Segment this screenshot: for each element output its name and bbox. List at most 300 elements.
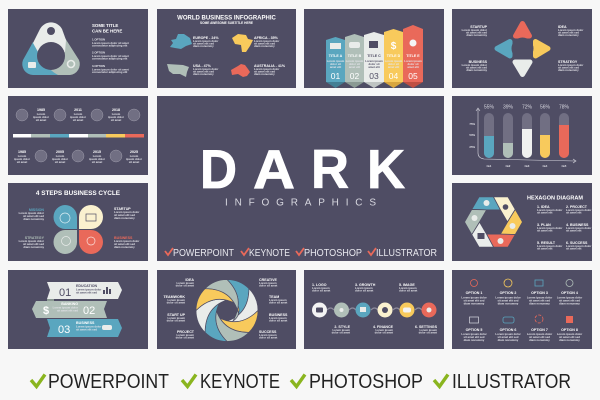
option 6: sit amet elit sed (498, 335, 519, 339)
option 7: OPTION 7 (531, 328, 548, 332)
label: usa: USA - 47% (193, 64, 212, 68)
ribbon 02: BANKING (61, 302, 78, 306)
column 5: amet elit (407, 65, 419, 69)
year 2025: 2025 (130, 150, 138, 154)
petal icons (60, 213, 96, 246)
label: australia: sit amet elit sed (254, 70, 275, 74)
label: strategy: diam nonummy (23, 245, 44, 249)
bar 2: №2 (506, 164, 511, 168)
option 2: Lorem ipsum dolor (495, 296, 522, 300)
label: europe: Lorem ipsum dolor (193, 39, 219, 43)
year 2011: Lorem (74, 112, 83, 116)
text block: Lorem ipsum dolor sit amet (92, 68, 129, 72)
option 4: OPTION 4 (561, 291, 578, 295)
labels right: SUCCESS (259, 330, 277, 334)
item 4: sit amet elit (566, 228, 581, 232)
check list (165, 247, 437, 259)
timeline bar (13, 134, 144, 138)
labels left: PROJECT (177, 330, 195, 334)
item 2: sit amet elit (566, 210, 581, 214)
text block (92, 50, 129, 60)
column 2 (345, 34, 364, 88)
option 6: diam nonummy (498, 338, 519, 342)
labels left: Lorem ipsum (176, 333, 195, 337)
label: strategy (19, 236, 45, 249)
title DARK: A (253, 139, 295, 200)
item 2: 2. PROJECT (566, 205, 588, 209)
item 1: sit amet elit (537, 210, 552, 214)
subtitle: SOME AWESOME SUBTITLE HERE (200, 21, 253, 25)
panel: 4 steps business cycle (8, 183, 148, 261)
option 4: diam nonummy (559, 302, 580, 306)
circle 1 (312, 302, 327, 318)
option 2 (495, 279, 522, 306)
ribbon 03: BUSINESS (76, 321, 95, 325)
label: startup (114, 207, 140, 220)
ribbon 02: sit amet elit sed (57, 308, 78, 312)
option 8: sit amet elit sed (559, 335, 580, 339)
title DARK: D (200, 139, 237, 200)
panel: timeline (8, 96, 148, 175)
option 6: OPTION 6 (500, 328, 516, 332)
column 5 (403, 25, 423, 88)
label: strategy: sit amet elit sed (558, 66, 579, 70)
ribbon 03: sit amet elit sed (76, 328, 97, 332)
labels right: TEAM (269, 295, 279, 299)
label: business: BUSINESS (114, 236, 133, 240)
column 3: amet elit (368, 65, 380, 69)
item 6: sit amet elit (566, 246, 581, 250)
label: usa (193, 64, 219, 76)
bar 5: №5 (562, 164, 567, 168)
column 1: amet elit (330, 65, 341, 69)
option 5: OPTION 5 (466, 328, 482, 332)
year 2005: 2005 (56, 150, 64, 154)
bar 3: 72% (522, 104, 533, 110)
option 6: Lorem ipsum dolor (495, 332, 522, 336)
text block: consectetur adipiscing elit (92, 56, 127, 60)
option 7: sit amet elit sed (529, 335, 550, 339)
labels left: dolor sit amet (167, 318, 185, 322)
panel: bar chart (452, 96, 592, 175)
year 2018: 2018 (112, 108, 120, 112)
map: australia (231, 64, 250, 77)
year 1985 (33, 108, 50, 122)
label: mission: Lorem ipsum dolor (19, 211, 45, 215)
year 2011: sit amet (73, 118, 83, 122)
check keynote (182, 374, 196, 386)
label: africa: sit amet elit sed (254, 42, 275, 46)
panel: triangle cycle (8, 9, 148, 88)
year 1985: 1985 (37, 108, 45, 112)
item 1: Lorem ipsum dolor (537, 208, 563, 212)
column 3: Lorem ipsum (365, 59, 383, 63)
ribbon 01: EDUCATION (76, 284, 97, 288)
label: startup: STARTUP (470, 25, 488, 29)
item 3: sit amet elit (537, 228, 552, 232)
title DARK (200, 139, 405, 200)
year 2025: sit amet (129, 160, 139, 164)
year 2015: 2015 (93, 150, 101, 154)
column 4: TITLE D (387, 54, 401, 58)
item 4: 4. BUSINESS (566, 223, 589, 227)
ribbon 03 (47, 319, 122, 337)
axis labels (469, 122, 476, 149)
labels right: CREATIVE (259, 278, 278, 282)
item 6: Lorem ipsum dolor (566, 244, 592, 248)
label 1 (312, 283, 330, 292)
panel: arrow columns (304, 9, 444, 88)
label 3: dolor sit amet (355, 288, 373, 292)
panel: swirl (157, 270, 296, 349)
label: startup: sit amet elit sed (114, 213, 135, 217)
title DARK: R (311, 139, 349, 200)
panel: central title (157, 96, 444, 261)
column 2: dolor sit (349, 62, 360, 66)
check photoshop (291, 374, 305, 386)
heading: HEXAGON DIAGRAM (527, 196, 583, 202)
heading: 4 STEPS BUSINESS CYCLE (36, 190, 121, 197)
year 2011 (70, 108, 87, 122)
year 1985: Lorem (37, 112, 46, 116)
option 1: Lorem ipsum dolor (461, 296, 488, 300)
option 4 (557, 280, 583, 306)
labels left: dolor sit amet (176, 284, 194, 288)
option 4: sit amet elit sed (559, 298, 580, 302)
ribbon 01: Lorem ipsum dolor (76, 288, 102, 292)
bar 3: №3 (525, 164, 530, 168)
illustrator: ILLUSTRATOR (452, 370, 571, 393)
item 5: 5. RESULT (537, 241, 556, 245)
label: strategy: Lorem ipsum dolor (19, 239, 45, 243)
labels left (163, 278, 195, 340)
year 2011: 2011 (74, 108, 82, 112)
text block: Lorem ipsum dolor sit amet (92, 41, 129, 45)
label: business: sit amet elit sed (466, 66, 487, 70)
year 2025: ipsum dolor (126, 157, 143, 161)
column 3 (364, 32, 384, 88)
year 1985 lower (14, 150, 31, 164)
option 5 (461, 317, 488, 342)
label 5: 5. IMAGE (399, 283, 415, 287)
subtitle: INFOGRAPHICS (225, 198, 376, 208)
year 2005: sit amet (55, 160, 65, 164)
labels left: dolor sit amet (167, 300, 185, 304)
panel: four triangles (452, 9, 592, 88)
label 4: Lorem ipsum (375, 328, 394, 332)
upper icons (16, 109, 140, 121)
label 4 (373, 325, 394, 334)
year 2015: ipsum dolor (89, 157, 106, 161)
label 3 (355, 283, 376, 292)
option 1: OPTION 1 (466, 291, 482, 295)
check list: KEYNOTE (249, 247, 290, 259)
label: startup: diam nonummy (466, 33, 487, 37)
year 2025: Lorem (130, 154, 139, 158)
option 3: Lorem ipsum dolor (527, 296, 553, 300)
year 2005 (52, 150, 69, 164)
item 6 (566, 241, 592, 250)
year 1985: sit amet (36, 118, 46, 122)
label: europe (193, 36, 219, 48)
ribbon 02: 02 (83, 305, 95, 317)
label 5: dolor sit amet (399, 288, 417, 292)
option 7: diam nonummy (529, 338, 550, 342)
bar 5 (559, 104, 570, 168)
option 5: Lorem ipsum dolor (461, 332, 488, 336)
circle 6 (422, 302, 436, 318)
bar 2 (503, 104, 514, 168)
text block: consectetur adipiscing elit (92, 70, 127, 74)
panel: process circles (304, 270, 444, 349)
axes (476, 108, 576, 163)
labels left: TEAMWORK (163, 295, 185, 299)
label: business: sit amet elit sed (114, 242, 135, 246)
option 2: sit amet elit sed (498, 298, 519, 302)
labels right: Lorem ipsum (259, 281, 277, 285)
label 2: dolor sit amet (332, 330, 350, 334)
column 2: amet elit (349, 65, 360, 69)
labels left: START UP (167, 313, 186, 317)
label: idea: sit amet elit sed (558, 30, 579, 34)
ribbon 03: 03 (58, 324, 70, 336)
labels right: dolor sit amet (269, 300, 287, 304)
column 4: $ (391, 41, 397, 52)
axis labels: 50% (469, 133, 476, 137)
triangle top (516, 24, 530, 36)
bar 4 (540, 104, 551, 168)
label: strategy: diam nonummy (558, 68, 579, 72)
year 2015 (89, 150, 106, 164)
labels right: dolor sit amet (259, 336, 277, 340)
label 2 (332, 325, 351, 334)
option 3: OPTION 3 (531, 291, 548, 295)
check list: ILLUSTRATOR (376, 247, 437, 259)
label 4: 4. FINANCE (373, 325, 394, 329)
ribbon 01: sit amet elit sed (76, 290, 97, 294)
option 8: OPTION 8 (561, 328, 578, 332)
column 5: 05 (408, 71, 418, 81)
labels right: Lorem ipsum (269, 316, 287, 320)
panel: options grid (452, 270, 592, 349)
bar 2: 39% (503, 104, 514, 110)
year 2025 (126, 150, 143, 164)
year 1985 lower: Lorem (18, 154, 27, 158)
year 1985 lower: sit amet (17, 160, 27, 164)
label: business: Lorem ipsum dolor (114, 239, 140, 243)
bar 1: №1 (487, 164, 492, 168)
label: strategy (558, 60, 584, 72)
label 6: Lorem ipsum (419, 328, 438, 332)
label: africa: AFRICA - 35% (254, 36, 279, 40)
text block (92, 38, 129, 48)
year 2005: Lorem (56, 154, 65, 158)
map: europe (170, 34, 192, 49)
label: business (114, 236, 140, 249)
petal: cream (79, 205, 103, 229)
text block: 2.OPTION (92, 50, 105, 54)
item 5 (537, 241, 563, 250)
label: startup: Lorem ipsum dolor (114, 210, 140, 214)
column 1: TITLE A (329, 54, 343, 58)
text block: consectetur adipiscing elit (92, 44, 127, 48)
bar 3 (522, 104, 533, 168)
label 1: Lorem ipsum (312, 286, 330, 290)
item 4: Lorem ipsum dolor (566, 226, 592, 230)
label: mission: MISSION (29, 208, 44, 212)
option 8 (557, 316, 583, 342)
option 7: Lorem ipsum dolor (527, 332, 553, 336)
label 6: 6. SETTINGS (415, 325, 438, 329)
label 2: Lorem ipsum (332, 328, 351, 332)
label: europe: sit amet elit sed (193, 42, 214, 46)
column 4 (384, 29, 403, 88)
label: startup: STARTUP (114, 207, 131, 211)
column 5: Lorem ipsum (404, 59, 422, 63)
labels right: Lorem ipsum (259, 333, 277, 337)
item 4 (566, 223, 592, 232)
year 2015: sit amet (92, 160, 102, 164)
label: europe: EUROPE - 24% (193, 36, 219, 40)
column 3: dolor sit (368, 62, 380, 66)
option 1: sit amet elit sed (464, 298, 485, 302)
labels right (259, 278, 288, 340)
column 3: TITLE C (367, 54, 381, 58)
option 7 (527, 315, 553, 342)
label 1: 1. LOGO (312, 283, 327, 287)
labels right: dolor sit amet (269, 318, 287, 322)
petal: teal (53, 205, 77, 229)
axis labels: 25% (469, 145, 476, 149)
label: startup: sit amet elit sed (466, 30, 487, 34)
label: africa: diam nonummy (254, 44, 275, 48)
label: startup (462, 25, 488, 37)
item 5: sit amet elit (537, 246, 552, 250)
label: africa: Lorem ipsum dolor (254, 39, 280, 43)
label: business: BUSINESS (469, 60, 488, 64)
panel: hexagon diagram (452, 183, 592, 261)
label 6 (415, 325, 438, 334)
year 2018: ipsum dolor (108, 115, 125, 119)
title DARK: K (367, 139, 405, 200)
hexagon diagram (461, 191, 526, 253)
ribbon 03: Lorem ipsum dolor (76, 324, 102, 328)
labels left: Lorem ipsum (176, 281, 195, 285)
swirl diagram (190, 273, 264, 348)
label: idea: IDEA (558, 25, 567, 29)
circle 4 (378, 302, 392, 318)
title: SOME TITLE (92, 23, 118, 28)
label: idea (558, 25, 584, 37)
centre cutout (512, 38, 534, 60)
label 5: Lorem ipsum (399, 286, 417, 290)
label: business: Lorem ipsum dolor (462, 63, 488, 67)
ribbon 01: 01 (59, 287, 71, 299)
year 2015: Lorem (93, 154, 102, 158)
triangle left (497, 42, 510, 56)
option 6 (495, 317, 522, 342)
label: australia: AUSTRALIA - 41% (254, 64, 286, 68)
option 3 (527, 280, 553, 306)
petal: grey (53, 230, 77, 254)
check list: POWERPOINT (173, 247, 234, 259)
labels left: dolor sit amet (176, 336, 194, 340)
year 2005: ipsum dolor (52, 157, 69, 161)
item 3 (537, 223, 563, 232)
connector wave (327, 308, 422, 310)
option 8: Lorem ipsum dolor (557, 332, 583, 336)
labels left: Lorem ipsum (167, 316, 186, 320)
map: africa (232, 34, 253, 52)
map: usa (167, 64, 189, 77)
option 4: Lorem ipsum dolor (557, 296, 583, 300)
label: strategy: sit amet elit sed (23, 242, 44, 246)
footer: compatible software (31, 370, 571, 393)
bar 5: 78% (559, 104, 570, 110)
option 1: diam nonummy (464, 302, 485, 306)
keynote: KEYNOTE (200, 370, 280, 393)
label: strategy: STRATEGY (25, 236, 45, 240)
text block: 1.OPTION (92, 38, 105, 42)
item 3: 3. PLAN (537, 223, 551, 227)
panel: ribbons (8, 270, 148, 349)
label: mission: diam nonummy (23, 217, 44, 221)
labels right: dolor sit amet (259, 284, 277, 288)
triangle bottom (515, 62, 530, 74)
column 2: Lorem ipsum (346, 59, 364, 63)
ribbon 02: $ (43, 305, 49, 317)
label 4: dolor sit amet (375, 330, 393, 334)
photoshop: PHOTOSHOP (309, 370, 423, 393)
column 1: 01 (331, 71, 340, 81)
label: mission: sit amet elit sed (23, 214, 44, 218)
year 1985 lower: 1985 (18, 150, 26, 154)
item 2 (566, 205, 592, 214)
circle 2 (334, 302, 349, 318)
text block (92, 64, 129, 74)
label 1: dolor sit amet (312, 288, 330, 292)
text block: Lorem ipsum dolor sit amet (92, 54, 129, 58)
label: business: diam nonummy (466, 68, 487, 72)
ribbon 01 (47, 282, 122, 299)
item 3: Lorem ipsum dolor (537, 226, 563, 230)
column 2: 02 (350, 71, 359, 81)
ribbon 02 (32, 299, 107, 318)
label: business: diam nonummy (114, 245, 135, 249)
circle 3 (356, 302, 370, 318)
option 5: sit amet elit sed (464, 335, 485, 339)
label 3: 3. GROWTH (355, 283, 376, 287)
bar 1: 55% (484, 104, 495, 110)
item 1: 1. IDEA (537, 205, 550, 209)
triangle diagram (22, 22, 80, 75)
option 1 (461, 280, 488, 306)
label 6: dolor sit amet (419, 330, 437, 334)
option 2: diam nonummy (498, 302, 519, 306)
check illustrator (434, 374, 448, 386)
labels right: BUSINESS (269, 313, 288, 317)
year 1985: ipsum dolor (33, 115, 50, 119)
bar 1 (484, 104, 495, 168)
option 3: sit amet elit sed (529, 298, 550, 302)
labels right: Lorem ipsum (269, 298, 287, 302)
option 2: OPTION 2 (500, 291, 516, 295)
column 1 (326, 37, 345, 88)
item 6: 6. SUCCESS (566, 241, 588, 245)
labels left: Lorem ipsum (167, 298, 186, 302)
item 5: Lorem ipsum dolor (537, 244, 563, 248)
option 8: diam nonummy (559, 338, 580, 342)
